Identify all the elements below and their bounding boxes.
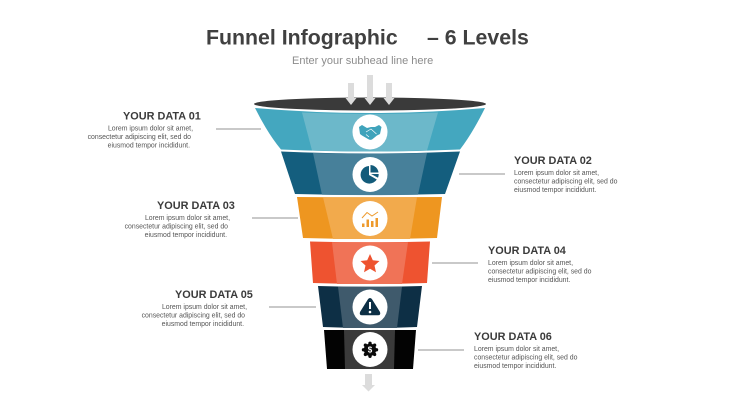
callout: data 05: Lorem ipsum dolor sit amet, xyxy=(162,304,247,311)
funnel level 6 xyxy=(324,330,416,369)
funnel level 1 xyxy=(255,108,485,152)
callout: data 02: YOUR DATA 02 xyxy=(514,155,592,167)
callout: data 06 xyxy=(418,331,578,370)
funnel level 2 xyxy=(281,152,460,195)
callout: data 01: consectetur adipiscing elit, sed do xyxy=(88,134,191,141)
callout: data 04: Lorem ipsum dolor sit amet, xyxy=(488,260,573,267)
callout: data 01 xyxy=(88,110,261,150)
callout: data 06: Lorem ipsum dolor sit amet, xyxy=(474,346,559,353)
funnel level 3 xyxy=(297,197,442,239)
arrow: input left xyxy=(346,83,356,105)
callout: data 04: consectetur adipiscing elit, sed do xyxy=(488,268,592,276)
callout: data 02: consectetur adipiscing elit, sed do xyxy=(514,178,618,186)
callout: data 02: eiusmod tempor incididunt. xyxy=(514,187,596,194)
icon: handshake xyxy=(359,125,382,140)
callout: data 06: YOUR DATA 06 xyxy=(474,331,552,343)
callout: data 05: YOUR DATA 05 xyxy=(175,289,253,301)
arrow: output xyxy=(362,374,375,392)
arrow: input centre xyxy=(364,75,376,105)
funnel mouth xyxy=(254,98,486,110)
funnel level 5 xyxy=(318,286,422,328)
icon: pie chart xyxy=(361,165,379,184)
callout: data 05: consectetur adipiscing elit, sed do xyxy=(142,312,245,320)
arrow: input right xyxy=(384,83,394,105)
callout: data 03: consectetur adipiscing elit, sed do xyxy=(125,224,228,230)
callout: data 03: Lorem ipsum dolor sit amet, xyxy=(145,215,230,222)
callout: data 01: Lorem ipsum dolor sit amet, xyxy=(108,126,193,132)
callout: data 01: YOUR DATA 01 xyxy=(123,110,201,122)
icon: bar and line chart xyxy=(362,212,378,227)
title: Funnel Infographic xyxy=(206,26,398,50)
callout: data 04 xyxy=(432,245,592,284)
callout: data 05 xyxy=(142,289,316,328)
title: – 6 Levels xyxy=(427,26,529,50)
icon: warning triangle xyxy=(360,298,380,315)
subhead: Enter your subhead line here xyxy=(292,55,433,67)
callout: data 03: eiusmod tempor incididunt. xyxy=(145,232,227,239)
callout: data 06: eiusmod tempor incididunt. xyxy=(474,363,556,370)
callout: data 05: eiusmod tempor incididunt. xyxy=(162,321,244,328)
callout: data 06: consectetur adipiscing elit, sed do xyxy=(474,354,578,362)
callout: data 04: eiusmod tempor incididunt. xyxy=(488,277,570,284)
funnel level 4 xyxy=(310,242,430,284)
callout: data 04: YOUR DATA 04 xyxy=(488,245,566,257)
callout: data 02: Lorem ipsum dolor sit amet, xyxy=(514,170,599,177)
callout: data 02 xyxy=(459,155,618,194)
title xyxy=(206,26,529,50)
callout: data 01: eiusmod tempor incididunt. xyxy=(108,142,190,150)
icon: star xyxy=(360,254,380,272)
callout: data 03: YOUR DATA 03 xyxy=(157,200,235,212)
icon: gear with dollar: $ xyxy=(368,346,373,355)
callout: data 03 xyxy=(125,200,298,239)
